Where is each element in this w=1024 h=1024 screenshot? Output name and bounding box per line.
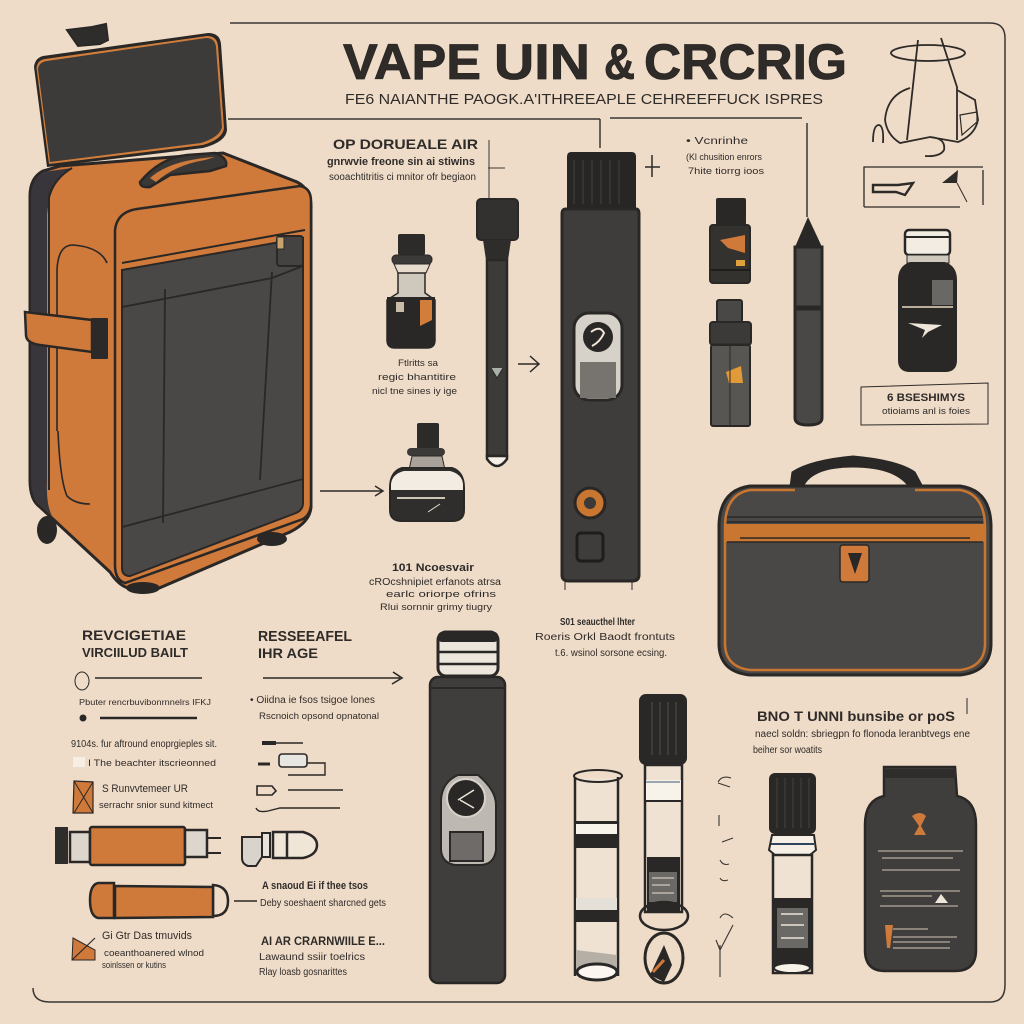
text block: upper right: • Vcnrinhe bbox=[686, 136, 749, 147]
text block: device: S01 seaucthel lhter bbox=[560, 617, 635, 628]
text block: large bottle: 101 Ncoesvair bbox=[392, 562, 475, 574]
heading: lower right: naecl soldn: sbriegpn fo flonoda leranbtvegs ene bbox=[755, 729, 970, 740]
text block: lower left bbox=[72, 930, 204, 971]
text block: device bbox=[535, 617, 675, 659]
heading: lower left bbox=[82, 627, 188, 660]
list: left column: serrachr snior sund kitmect bbox=[99, 800, 213, 811]
text block: oil bottle bbox=[372, 358, 457, 397]
orange tube connector bbox=[55, 827, 221, 865]
stylus pen bbox=[795, 217, 822, 425]
text block: upper right: (Kl chusition enrors bbox=[686, 152, 762, 163]
lower vape device bbox=[430, 632, 505, 983]
text block: oil bottle: regic bhantitire bbox=[378, 372, 456, 383]
heading: lower center: IHR AGE bbox=[258, 645, 318, 661]
text block: large bottle: cROcshnipiet erfanots atrsa bbox=[369, 577, 501, 588]
text block: oil bottle: nicl tne sines iy ige bbox=[372, 386, 457, 397]
title: UIN bbox=[494, 34, 590, 90]
text block: lower center: Lawaund ssiir toelrics bbox=[259, 952, 365, 963]
side strap bbox=[25, 312, 108, 359]
heading: lower center bbox=[258, 628, 352, 661]
list: center column: • Oiidna ie fsos tsigoe lones bbox=[250, 695, 375, 706]
small oil bottle bbox=[387, 234, 435, 348]
title: & bbox=[604, 34, 635, 90]
black jar bbox=[898, 230, 957, 372]
list: left column: I The beachter itscrieonned bbox=[88, 758, 216, 769]
vertical marks bbox=[716, 777, 733, 977]
clear glass tube bbox=[574, 770, 622, 980]
text block: lower center bbox=[259, 934, 385, 978]
suitcase handle bbox=[140, 153, 226, 187]
list: left column bbox=[71, 672, 217, 813]
arrow bbox=[320, 486, 383, 496]
suitcase lid bbox=[34, 33, 227, 167]
text block: lower left: coeanthoanered wlnod bbox=[104, 948, 204, 959]
text block: large bottle bbox=[369, 562, 501, 613]
list: center column: Rscnoich opsond opnatonal bbox=[259, 711, 379, 722]
title bbox=[343, 34, 847, 90]
text block: device: t.6. wsinol sorsone ecsing. bbox=[555, 648, 667, 659]
text block: lower left: Gi Gtr Das tmuvids bbox=[102, 930, 192, 942]
arrow bbox=[518, 356, 539, 372]
suitcase body bbox=[30, 153, 311, 589]
vial bbox=[769, 773, 816, 973]
list: left column: Pbuter rencrbuvibonrnnelrs IFKJ bbox=[79, 698, 211, 707]
heading: lower center: RESSEEAFEL bbox=[258, 628, 352, 645]
text box: jar bbox=[861, 383, 988, 425]
text block: upper center: sooachtitritis ci mnitor ofr begiaon bbox=[329, 172, 476, 183]
travel pouch bbox=[719, 456, 991, 675]
large bottle bbox=[390, 423, 464, 521]
text block: lower center: Rlay loasb gosnarittes bbox=[259, 967, 347, 978]
heading: lower left: REVCIGETIAE bbox=[82, 627, 186, 643]
text box: jar: 6 BSESHIMYS bbox=[887, 392, 965, 404]
small cartridge bottom bbox=[710, 300, 751, 426]
outline sketch top right bbox=[873, 38, 978, 156]
text block: capsule: A snaoud Ei if thee tsos bbox=[262, 880, 368, 892]
heading: lower right: beiher sor woatits bbox=[753, 745, 822, 756]
text box: jar: otioiams anl is foies bbox=[882, 406, 970, 417]
heading: lower right: BNO T UNNI bunsibe or poS bbox=[757, 708, 955, 724]
text block: upper right: 7hite tiorrg ioos bbox=[688, 166, 764, 177]
plus sign bbox=[645, 155, 660, 177]
text block: capsule: Deby soeshaent sharcned gets bbox=[260, 898, 386, 909]
suitcase top grip bbox=[67, 24, 108, 46]
text block: oil bottle: Ftlritts sa bbox=[398, 358, 439, 369]
text block: upper center: gnrwvie freone sin ai stiwins bbox=[327, 156, 475, 168]
heading: lower left: VIRCIILUD BAILT bbox=[82, 645, 188, 660]
black pouch with label bbox=[865, 767, 976, 971]
list: center column bbox=[250, 672, 402, 812]
small diagram box bbox=[864, 167, 983, 207]
text block: large bottle: Rlui sornnir grimy tiugry bbox=[380, 602, 492, 613]
text block: upper center bbox=[327, 136, 478, 183]
suitcase bbox=[25, 24, 311, 594]
text block: capsule bbox=[260, 880, 386, 909]
key-ring vape tube bbox=[639, 694, 688, 983]
title: CRCRIG bbox=[644, 34, 847, 90]
white connector bbox=[242, 832, 317, 866]
text block: lower left: soinlssen or kutins bbox=[102, 960, 166, 971]
list: left column: 9104s. fur aftround enoprgieples sit. bbox=[71, 739, 217, 750]
text block: upper center: OP DORUEALE AIR bbox=[333, 136, 478, 152]
text block: lower center: AI AR CRARNWIILE E... bbox=[261, 934, 385, 948]
small cartridge top bbox=[710, 198, 750, 283]
list: left column: S Runvvtemeer UR bbox=[102, 783, 188, 795]
wheels bbox=[37, 516, 287, 594]
subtitle: FE6 NAIANTHE PAOGK.A'ITHREEAPLE CEHREEFFUCK ISPRES bbox=[345, 92, 823, 108]
title: VAPE bbox=[343, 34, 481, 90]
slim vape pen bbox=[477, 199, 518, 466]
main vape device bbox=[562, 152, 639, 590]
orange capsule bbox=[90, 883, 257, 918]
text block: large bottle: earlc oriorpe ofrins bbox=[386, 589, 496, 600]
heading: lower right bbox=[753, 698, 970, 756]
text block: upper right bbox=[686, 136, 764, 177]
text block: device: Roeris Orkl Baodt frontuts bbox=[535, 632, 675, 643]
